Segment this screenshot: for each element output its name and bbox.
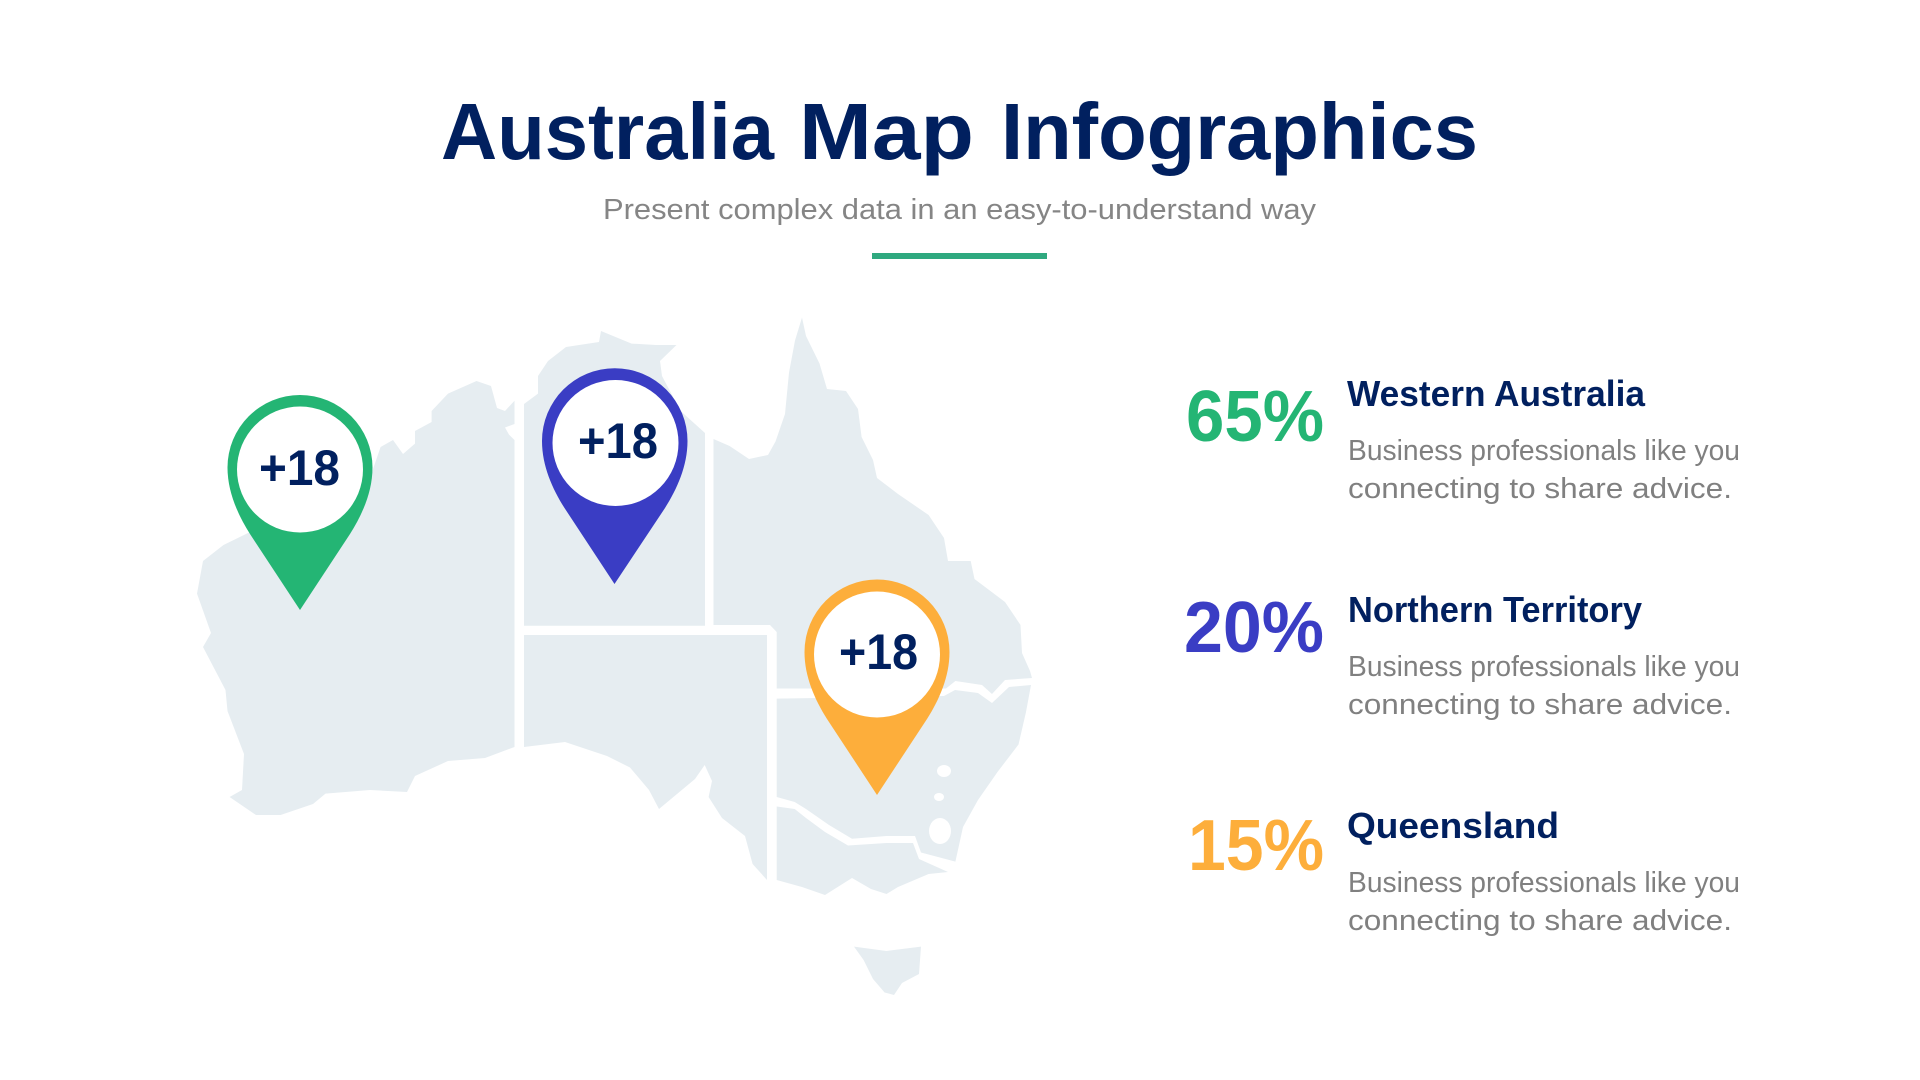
pin: blue: +18 (578, 413, 658, 469)
description (1348, 651, 1740, 721)
map of Australia (197, 318, 1032, 995)
title: Map (799, 87, 974, 176)
stat: Queensland (1188, 805, 1740, 937)
title (441, 87, 1478, 176)
title: Infographics (1001, 87, 1478, 176)
percentage: 15%: 15% (1188, 806, 1324, 886)
region: South Australia (524, 635, 767, 880)
heading: Western Australia: Western Australia (1347, 373, 1646, 414)
pin: orange: +18 (839, 624, 918, 680)
description: Business professionals like you (1348, 651, 1740, 683)
pin: orange (804, 580, 950, 795)
pin: green (228, 395, 372, 610)
description: Business professionals like you (1348, 867, 1740, 899)
region: Queensland (714, 318, 1032, 694)
region: Western Australia (197, 381, 514, 815)
title underline accent (872, 253, 1047, 259)
pin: green: +18 (259, 440, 340, 496)
description: connecting to share advice. (1348, 689, 1732, 721)
title: Australia (441, 87, 774, 176)
heading: Queensland: Queensland (1347, 805, 1559, 846)
description (1348, 867, 1740, 937)
region: Northern Territory (524, 331, 705, 626)
region: Tasmania (854, 947, 921, 995)
stat: Northern Territory (1184, 588, 1740, 721)
percentage: 20%: 20% (1184, 588, 1324, 668)
description: connecting to share advice. (1348, 473, 1732, 505)
subtitle: Present complex data in an easy-to-understand way (603, 194, 1317, 226)
region: Victoria (777, 806, 948, 895)
description: connecting to share advice. (1348, 905, 1732, 937)
description: Business professionals like you (1348, 435, 1740, 467)
region: New South Wales (777, 685, 1031, 862)
pin: blue (542, 368, 688, 584)
stat: Western Australia (1186, 373, 1740, 505)
description (1348, 435, 1740, 505)
heading: Northern Territory: Northern Territory (1348, 589, 1642, 630)
percentage: 65%: 65% (1186, 377, 1324, 457)
inland lakes (929, 765, 951, 844)
